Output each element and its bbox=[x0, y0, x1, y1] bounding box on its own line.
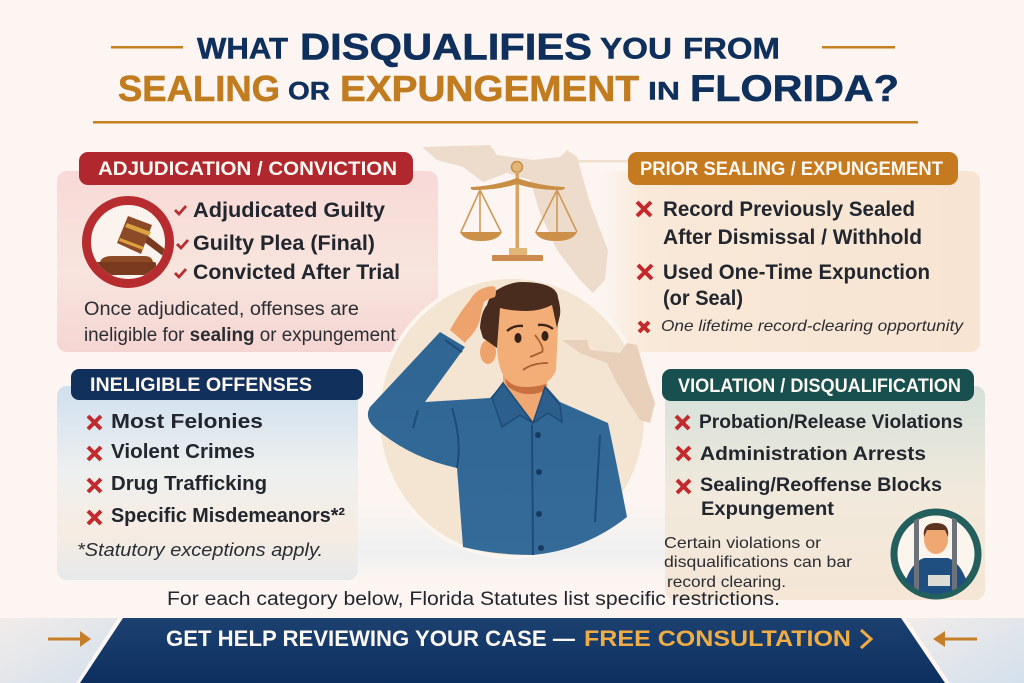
icon: x marks violation bbox=[676, 416, 690, 493]
backdrop circle bbox=[378, 277, 646, 557]
list: violation items: Probation/Release Violations bbox=[699, 412, 963, 433]
banner text: GET HELP REVIEWING YOUR CASE — bbox=[166, 626, 575, 651]
list: adjudication items: Adjudicated Guilty bbox=[193, 199, 385, 222]
neck shadow bbox=[505, 378, 547, 394]
text: violation note: record clearing. bbox=[667, 574, 786, 591]
list: violation items: Expungement bbox=[701, 499, 835, 520]
list: prior sealing items bbox=[663, 198, 930, 310]
icon: man behind bars bbox=[894, 512, 978, 600]
arrow: left bbox=[48, 631, 91, 647]
text: adjudication note: Once adjudicated, offenses are bbox=[84, 299, 359, 320]
list: prior sealing items: (or Seal) bbox=[663, 287, 743, 310]
icon: chevron bbox=[861, 630, 871, 648]
title: SEALING bbox=[118, 68, 280, 109]
ear bbox=[480, 340, 496, 364]
list: prior sealing items: Record Previously Sealed bbox=[663, 198, 915, 221]
list: prior sealing items: Used One-Time Expunction bbox=[663, 261, 930, 284]
text: violation note bbox=[664, 535, 853, 591]
panel: adjudication / conviction bbox=[57, 152, 438, 352]
map: Florida lower bbox=[562, 340, 655, 423]
text: violation note: Certain violations or bbox=[664, 535, 822, 552]
background water wash bbox=[358, 500, 665, 592]
nose and mouth bbox=[523, 335, 548, 370]
panel: prior sealing / expungement bbox=[578, 160, 980, 352]
title bbox=[93, 26, 918, 124]
title: EXPUNGEMENT bbox=[340, 68, 639, 109]
panel: violation background bbox=[665, 386, 985, 600]
map: Florida upper bbox=[422, 145, 608, 293]
list: violation items: Administration Arrests bbox=[700, 444, 926, 465]
eyes and brows bbox=[507, 325, 553, 343]
heading: ineligible offenses bbox=[71, 369, 363, 400]
list: adjudication items: Convicted After Trial bbox=[193, 261, 400, 284]
heading: violation bbox=[662, 369, 974, 401]
title: FROM bbox=[683, 32, 780, 66]
banner text bbox=[166, 626, 851, 651]
text: prior sealing note: One lifetime record-clearing opportunity bbox=[661, 318, 964, 335]
icon: prohibited gavel bbox=[86, 200, 170, 284]
panel: ineligible offenses background bbox=[57, 386, 358, 580]
illustration: worried man bbox=[368, 277, 655, 557]
title: IN bbox=[648, 78, 680, 106]
heading: adjudication: ADJUDICATION / CONVICTION bbox=[98, 159, 397, 180]
banner side right bbox=[906, 618, 1024, 683]
title: DISQUALIFIES bbox=[300, 26, 592, 68]
text: statutes line: For each category below, Florida Statutes list specific restrictions. bbox=[167, 589, 780, 610]
text: adjudication note bbox=[84, 299, 401, 346]
text: statutory note: *Statutory exceptions apply. bbox=[77, 540, 323, 560]
neck bbox=[503, 365, 547, 423]
icon: x marks prior sealing bbox=[637, 202, 652, 332]
hair bbox=[480, 282, 560, 348]
list: adjudication items bbox=[193, 199, 400, 284]
icon: x marks ineligible bbox=[88, 416, 101, 524]
banner: call to action bbox=[0, 618, 1024, 683]
list: ineligible items bbox=[111, 411, 345, 527]
collar bbox=[492, 383, 562, 427]
heading: ineligible offenses: INELIGIBLE OFFENSES bbox=[90, 375, 312, 396]
list: violation items: Sealing/Reoffense Blocks bbox=[700, 475, 942, 496]
shirt details bbox=[413, 340, 600, 555]
list: violation items bbox=[699, 412, 963, 520]
icon: check marks bbox=[175, 206, 188, 277]
banner side left bbox=[0, 618, 118, 683]
title: OR bbox=[288, 78, 330, 106]
shirt bbox=[368, 332, 627, 555]
heading: adjudication bbox=[79, 152, 413, 185]
icon: scales of justice bbox=[460, 162, 577, 261]
banner navy bbox=[80, 618, 945, 683]
list: ineligible items: Specific Misdemeanors*² bbox=[111, 505, 345, 527]
title: FLORIDA? bbox=[690, 68, 899, 109]
heading: prior sealing bbox=[628, 152, 958, 185]
list: ineligible items: Violent Crimes bbox=[111, 441, 255, 463]
title: WHAT bbox=[197, 32, 288, 66]
buttons bbox=[535, 432, 544, 551]
title: YOU bbox=[600, 32, 672, 66]
hand bbox=[450, 286, 496, 343]
list: ineligible items: Most Felonies bbox=[111, 411, 263, 433]
list: adjudication items: Guilty Plea (Final) bbox=[193, 232, 375, 255]
heading: violation: VIOLATION / DISQUALIFICATION bbox=[678, 376, 961, 397]
face bbox=[497, 305, 558, 387]
text: violation note: disqualifications can bar bbox=[664, 554, 853, 571]
arrow: right bbox=[933, 631, 977, 647]
banner text: FREE CONSULTATION bbox=[584, 626, 851, 651]
list: ineligible items: Drug Trafficking bbox=[111, 473, 267, 495]
heading: prior sealing: PRIOR SEALING / EXPUNGEMENT bbox=[640, 159, 943, 180]
list: prior sealing items: After Dismissal / Withhold bbox=[663, 226, 922, 249]
text: adjudication note: ineligible for sealing or expungement. bbox=[84, 325, 401, 346]
